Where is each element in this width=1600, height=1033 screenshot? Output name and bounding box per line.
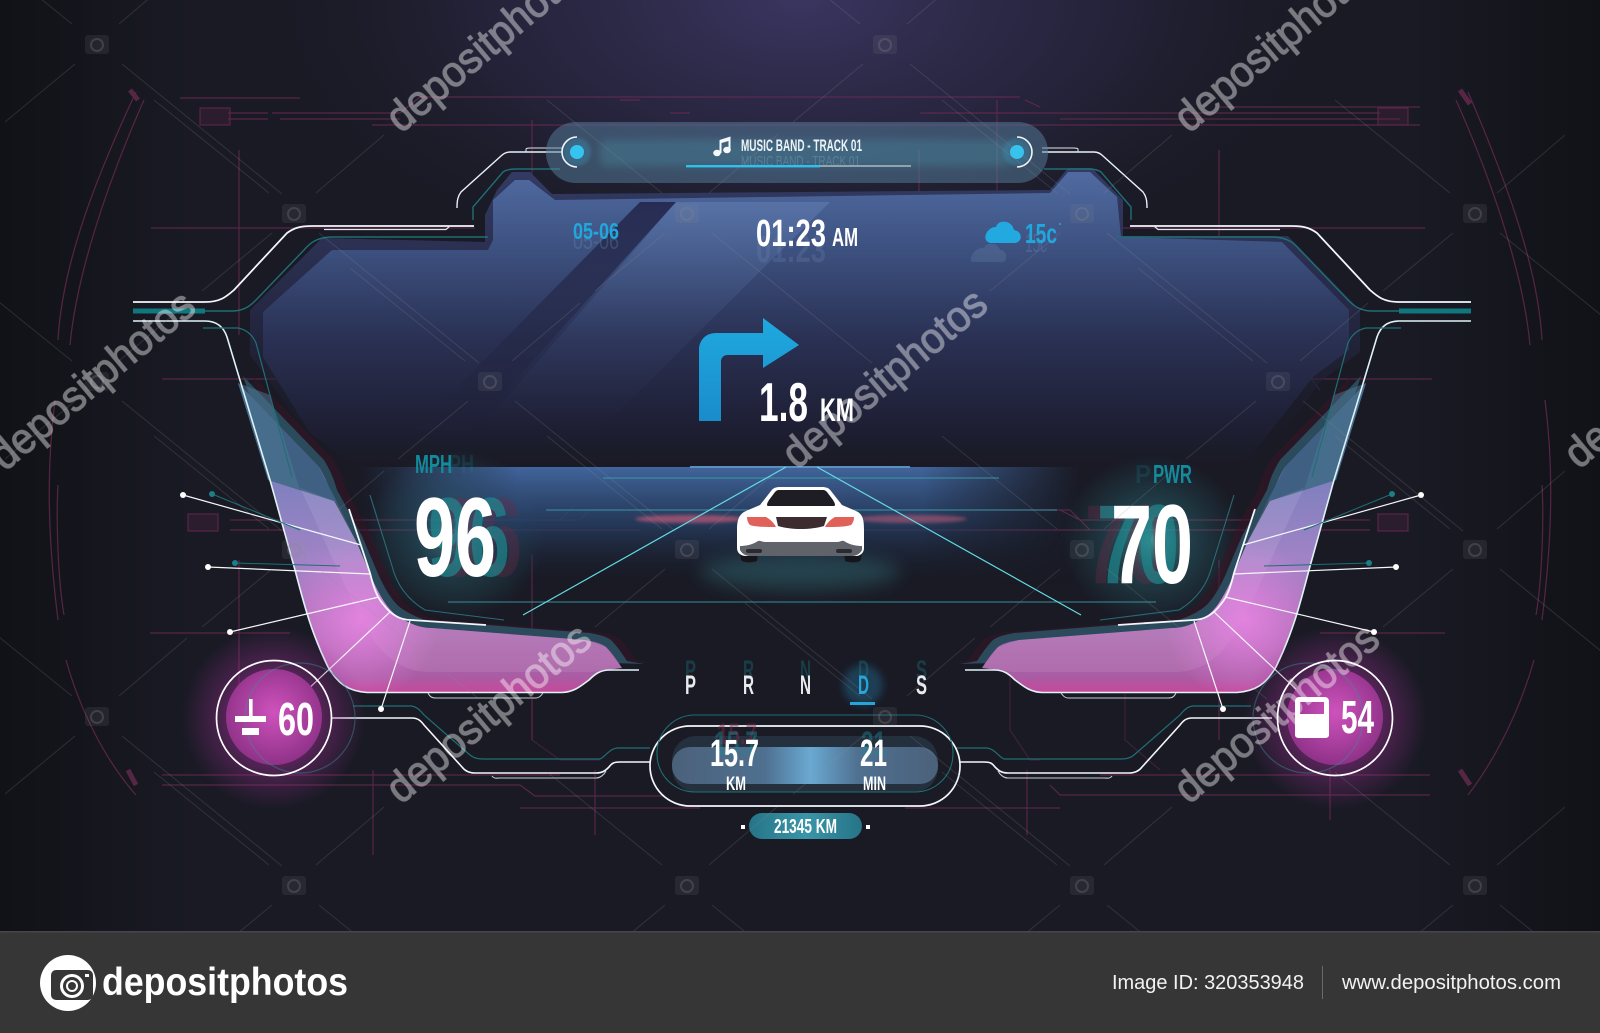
music track pill bbox=[546, 122, 1048, 183]
icon: cloud bbox=[985, 222, 1021, 243]
trip distance bbox=[710, 718, 759, 795]
PWR power readout: P bbox=[1135, 459, 1151, 489]
teal and red glow behind speed readouts bbox=[365, 450, 1242, 625]
stock watermark text: depositphotos bbox=[773, 279, 996, 478]
rear window bbox=[767, 490, 835, 506]
weather: 15c bbox=[1025, 228, 1047, 258]
wing shape right bbox=[951, 375, 1366, 700]
trip summary pill bbox=[650, 715, 960, 806]
MPH speed readout: PH bbox=[449, 449, 474, 479]
car body bbox=[737, 487, 864, 556]
PWR power readout: 70 bbox=[1111, 482, 1193, 607]
lower bumper bbox=[740, 541, 862, 556]
odometer badge: 21345 KM bbox=[774, 816, 837, 838]
date bbox=[573, 218, 619, 254]
MPH speed readout: 96 bbox=[440, 475, 522, 600]
clock: 01:23 bbox=[756, 213, 826, 255]
gear selector PRNDS: S bbox=[916, 655, 927, 685]
decorative HUD wireframe lines bbox=[49, 90, 1551, 855]
trip time: MIN bbox=[863, 774, 886, 795]
icon: cloud ghost bbox=[971, 244, 1006, 262]
frame lines left bbox=[133, 148, 650, 778]
track title: MUSIC BAND - TRACK 01 bbox=[741, 136, 862, 155]
site url: www.depositphotos.com bbox=[1341, 971, 1561, 994]
trip distance: 15.7 bbox=[714, 725, 758, 763]
distance to turn: 1.8 bbox=[759, 371, 808, 433]
trip time: 21 bbox=[861, 725, 886, 763]
weather bbox=[971, 218, 1061, 262]
navigation perspective guide lines bbox=[523, 467, 1081, 615]
road surface band bbox=[360, 466, 1156, 602]
gear selector PRNDS: P bbox=[685, 670, 696, 700]
exhausts bbox=[746, 549, 852, 553]
gear selector PRNDS bbox=[685, 655, 927, 705]
trip time bbox=[860, 725, 887, 795]
music track pill: MUSIC BAND - TRACK 01 bbox=[741, 153, 860, 170]
inner bar bbox=[672, 747, 938, 784]
trip distance: KM bbox=[726, 774, 746, 795]
MPH speed readout: 96 bbox=[414, 475, 496, 600]
icon: fuel pump bbox=[1295, 697, 1329, 738]
footer logo icon bbox=[40, 955, 96, 1011]
trip distance: 15.7 bbox=[717, 718, 757, 751]
tail lights bbox=[747, 517, 854, 527]
PWR power readout: 70 bbox=[1085, 482, 1167, 607]
glass reflection stripes bbox=[415, 202, 830, 440]
battery gauge circle: 60 bbox=[278, 693, 314, 745]
date: 05-06 bbox=[573, 228, 619, 254]
stock watermark text: depositphotos bbox=[1165, 614, 1388, 813]
trip time: 21 bbox=[860, 733, 887, 775]
frame lines right bbox=[954, 148, 1471, 778]
right indicator bbox=[1003, 137, 1032, 167]
music note icon bbox=[713, 136, 731, 156]
odometer badge bbox=[741, 813, 870, 839]
left indicator bbox=[562, 137, 591, 167]
gear selector PRNDS: R bbox=[743, 655, 754, 685]
gear selector PRNDS: P bbox=[685, 655, 696, 685]
wheels bbox=[740, 550, 862, 562]
image id: Image ID: 320353948 bbox=[1112, 971, 1304, 994]
stock watermark text bbox=[0, 0, 1600, 813]
clock: AM bbox=[832, 222, 858, 252]
wing shape left bbox=[238, 375, 653, 700]
trip distance: 15.7 bbox=[710, 733, 759, 775]
clock: 01:23 bbox=[756, 229, 826, 271]
fuel gauge circle: 54 bbox=[1341, 691, 1374, 743]
weather: 15c bbox=[1025, 218, 1057, 249]
battery gauge circle bbox=[182, 626, 366, 810]
footer bar bbox=[0, 931, 1600, 1033]
gear selector PRNDS: S bbox=[916, 670, 927, 700]
clock bbox=[756, 213, 858, 271]
date: 05-06 bbox=[573, 218, 619, 244]
gear selector PRNDS: D bbox=[858, 655, 869, 685]
gear selector PRNDS: N bbox=[800, 655, 811, 685]
car illustration bbox=[737, 487, 864, 562]
main windshield glass panel bbox=[250, 168, 1360, 480]
gear selector PRNDS: N bbox=[800, 670, 811, 700]
icon: turn-right navigation arrow bbox=[699, 318, 799, 421]
gear selector PRNDS: R bbox=[743, 670, 754, 700]
fuel gauge circle bbox=[1243, 626, 1427, 810]
PWR power readout: PWR bbox=[1153, 459, 1192, 489]
progress bar bbox=[686, 165, 911, 167]
icon: ground / battery bbox=[235, 699, 266, 735]
PWR power readout: 70 bbox=[1097, 482, 1179, 607]
footer logo wordmark: depositphotos bbox=[102, 961, 348, 1004]
gear selector PRNDS: D bbox=[858, 670, 869, 700]
MPH speed readout: 96 bbox=[428, 475, 510, 600]
distance to turn: KM bbox=[820, 392, 854, 428]
tail light band bbox=[776, 517, 827, 529]
MPH speed readout: MPH bbox=[415, 449, 452, 479]
stock watermark text: depositphotos bbox=[377, 614, 600, 813]
